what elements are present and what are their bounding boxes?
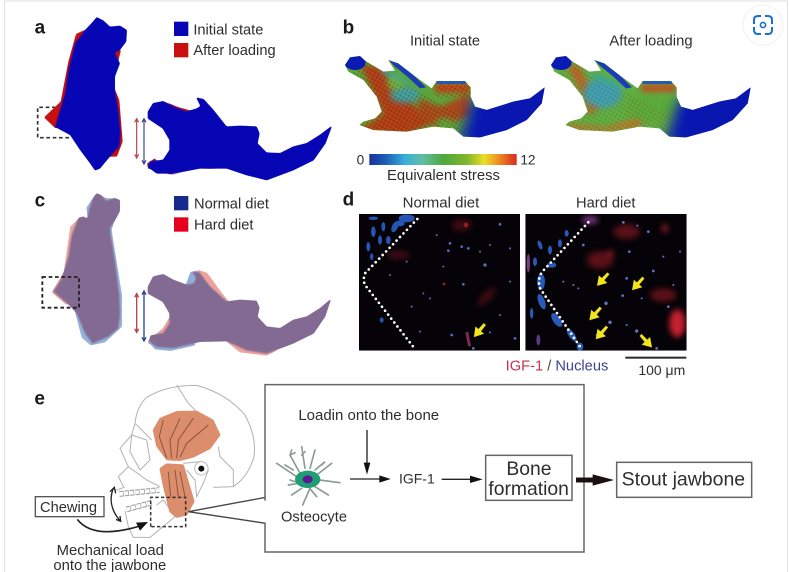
bone formation box (486, 455, 572, 500)
process box (265, 385, 752, 552)
panel d: IGF-1 micrographs (343, 190, 687, 378)
stout jawbone box (617, 462, 752, 497)
box outline (265, 385, 584, 552)
temporalis muscle (153, 411, 221, 461)
label b: b (343, 17, 354, 38)
icon: osteocyte (277, 447, 340, 505)
label c: c (35, 191, 45, 212)
label d: d (343, 190, 354, 211)
jaw side view a (147, 97, 332, 180)
legend a: After loading (193, 43, 276, 59)
chewing motion arrow (110, 487, 121, 521)
legend c (174, 196, 269, 233)
chewing box (35, 497, 104, 517)
legend c: Hard diet (194, 217, 253, 233)
loading text: Loadin onto the bone (298, 407, 439, 424)
panel c: normal vs hard diet (35, 191, 331, 356)
title normal diet: Normal diet (403, 195, 480, 212)
stress map initial (345, 56, 545, 138)
double arrows a (135, 119, 146, 164)
legend a (174, 22, 276, 59)
scale bar (625, 357, 686, 378)
scale bar: 100 μm (638, 362, 685, 378)
bone formation box: Bone (506, 459, 551, 480)
double arrows c (135, 291, 146, 341)
IGF-1 text: IGF-1 (399, 470, 435, 486)
arrow normal diet (470, 320, 489, 341)
colour scale (357, 153, 536, 184)
mechanical load arrow (77, 519, 148, 532)
arrows hard diet (585, 269, 656, 351)
jaw front view c (52, 193, 122, 345)
arrow to IGF-1 (350, 475, 391, 483)
masseter muscle (159, 463, 195, 518)
bone formation box: formation (488, 479, 569, 500)
panel a: initial state vs after loading (35, 17, 332, 180)
IGF-1 nucleus caption: IGF-1 / Nucleus (506, 359, 608, 375)
callout lines (188, 497, 266, 523)
stout jawbone box: Stout jawbone (622, 469, 745, 491)
skull (115, 385, 254, 537)
micrograph hard diet (525, 214, 687, 351)
panel b: equivalent stress maps (340, 17, 759, 184)
arrow to bone formation (442, 476, 483, 483)
title after loading: After loading (609, 33, 693, 49)
colour scale: Equivalent stress (387, 168, 500, 184)
dashed region box a (38, 107, 72, 138)
dashed region box e (151, 497, 186, 527)
jaw front view a (44, 17, 127, 171)
thick arrow (576, 474, 614, 486)
title hard diet: Hard diet (576, 196, 635, 212)
teeth (119, 490, 159, 509)
panel e: mechanism (34, 385, 266, 572)
dashed region box c (42, 277, 79, 308)
legend a: Initial state (193, 22, 263, 38)
colour scale: 12 (520, 153, 536, 168)
stress map after loading (551, 56, 751, 138)
loading arrow (364, 430, 370, 475)
legend c: Normal diet (194, 197, 269, 213)
colour scale: 0 (357, 153, 365, 168)
chewing box: Chewing (40, 500, 97, 516)
ear hole (195, 462, 208, 475)
label a: a (35, 17, 46, 38)
mechanical load text: Mechanical load (57, 543, 164, 559)
title initial state: Initial state (410, 33, 480, 49)
label e: e (34, 388, 45, 409)
osteocyte label: Osteocyte (281, 510, 347, 526)
icon: lens button (743, 5, 783, 45)
micrograph normal diet (359, 214, 520, 351)
jaw side view c (148, 270, 331, 356)
